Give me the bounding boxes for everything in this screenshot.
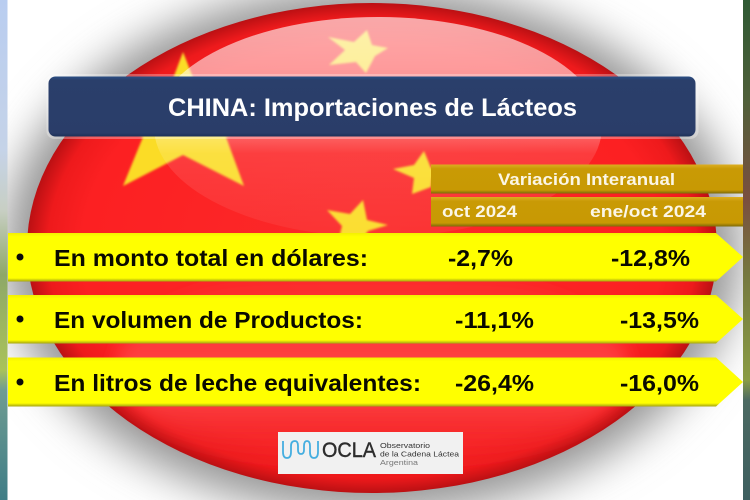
value ene/oct 2024: -12,8%	[611, 245, 690, 271]
row: volumen de productos	[8, 295, 743, 344]
row: litros de leche equivalentes	[8, 358, 743, 406]
logo plate	[278, 432, 463, 474]
value ene/oct 2024: -16,0%	[620, 370, 699, 396]
bullet	[16, 254, 24, 260]
arrow band	[8, 233, 743, 282]
photo strip: right edge	[743, 0, 750, 500]
small star middle	[393, 151, 445, 194]
logo subtitle line 1: Observatorio	[380, 441, 430, 450]
banner shape	[48, 76, 696, 136]
value ene/oct 2024: -13,5%	[620, 307, 699, 333]
logo subtitle line 2: de la Cadena Láctea	[380, 450, 460, 458]
title text: CHINA: Importaciones de Lácteos	[168, 94, 577, 122]
row: monto total en dólares	[8, 233, 743, 282]
value oct 2024: -26,4%	[455, 370, 534, 396]
table subheader: periods	[431, 197, 743, 226]
lower glow	[117, 266, 627, 470]
bullet	[16, 316, 24, 322]
photo strip: left edge	[0, 0, 8, 500]
period: ene/oct 2024: ene/oct 2024	[590, 202, 707, 221]
row label: En litros de leche equivalentes:	[54, 370, 421, 396]
gloss highlight	[154, 17, 602, 237]
header bar	[431, 164, 743, 194]
logo wordmark: OCLA	[322, 439, 376, 462]
period: oct 2024: oct 2024	[442, 202, 518, 221]
header text: Variación Interanual	[498, 170, 675, 189]
arrow band	[8, 358, 743, 406]
icon: OCLA wave	[283, 441, 318, 458]
OCLA logo	[278, 432, 463, 474]
bullet	[16, 378, 24, 386]
subheader bar	[431, 197, 743, 226]
small star lower	[327, 200, 388, 242]
small star top	[328, 30, 388, 73]
table header: Variación Interanual	[431, 164, 743, 194]
value oct 2024: -2,7%	[448, 245, 513, 271]
large star	[100, 52, 270, 186]
logo subtitle line 3: Argentina	[380, 458, 419, 467]
row label: En volumen de Productos:	[54, 307, 363, 333]
title banner	[46, 74, 698, 139]
flag stars	[100, 30, 445, 242]
value oct 2024: -11,1%	[455, 307, 534, 333]
banner halo	[46, 74, 698, 139]
row label: En monto total en dólares:	[54, 245, 368, 271]
arrow band	[8, 295, 743, 344]
